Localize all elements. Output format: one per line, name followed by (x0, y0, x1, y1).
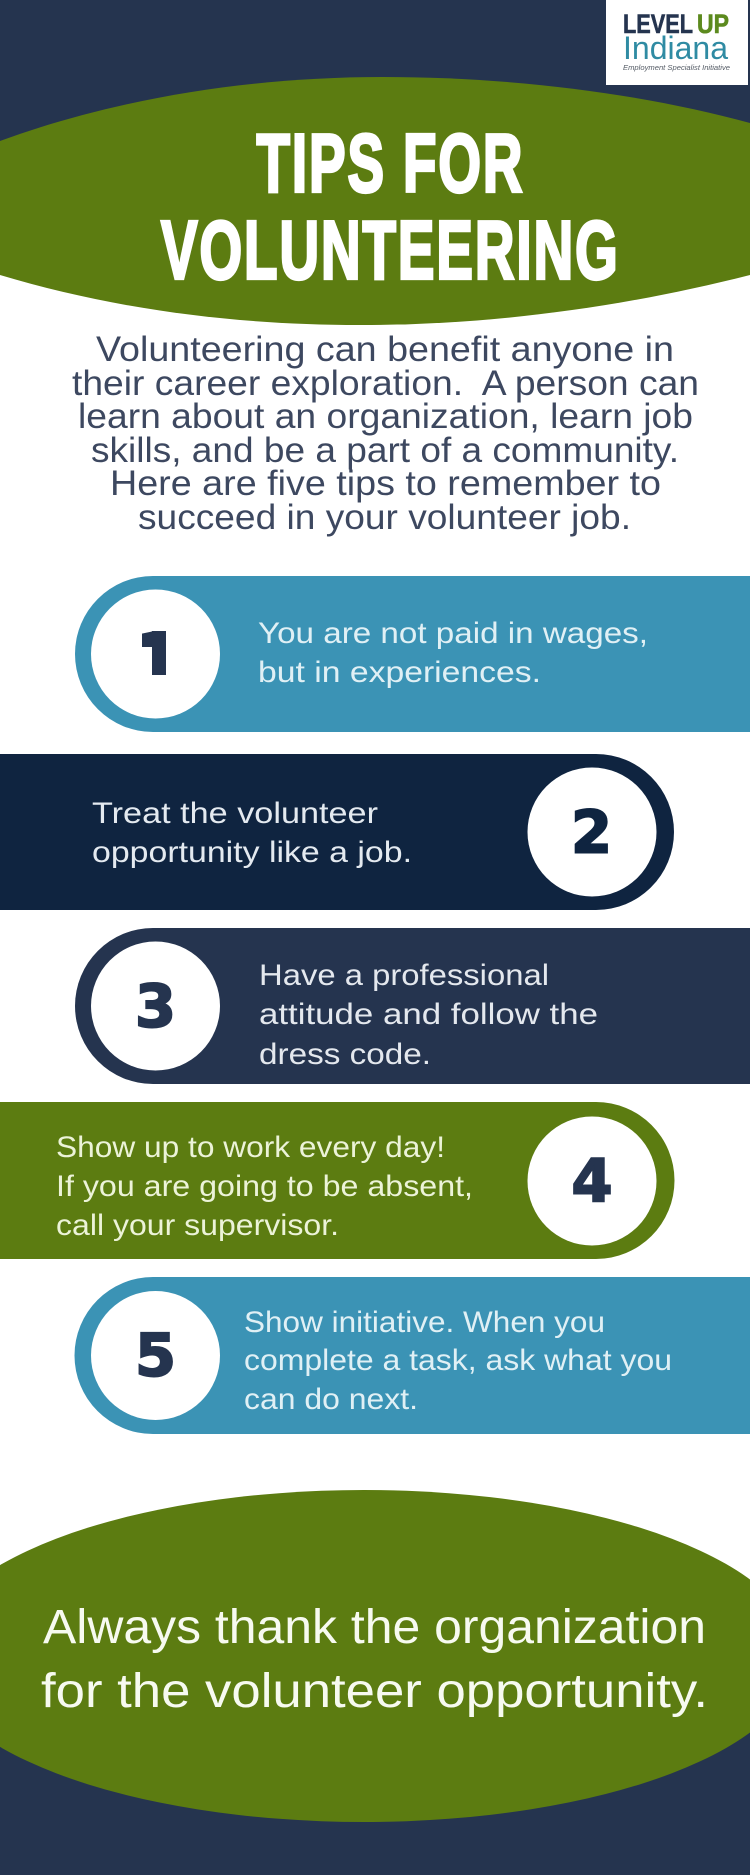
panel: tip 3: 3 (135, 972, 176, 1040)
title: VOLUNTEERING (161, 203, 618, 296)
footer band: navy background (0, 1580, 750, 1875)
panel: tip 5: can do next. (244, 1383, 418, 1416)
intro text block: learn about an organization, learn job (78, 397, 693, 436)
panel: tip 4 (0, 1102, 674, 1259)
panel: tip 3: dress code. (259, 1038, 431, 1071)
panel: tip 4: If you are going to be absent, (56, 1170, 473, 1203)
panel: tip 1: 1 (135, 620, 177, 690)
panel: tip 5: Show initiative. When you (244, 1306, 605, 1339)
panel: tip 3: attitude and follow the (259, 998, 598, 1031)
header band: navy background (0, 0, 750, 200)
panel: tip 5: complete a task, ask what you (244, 1344, 672, 1377)
logo: Level Up Indiana (606, 0, 748, 85)
closing message: for the volunteer opportunity. (41, 1665, 708, 1718)
panel: tip 4: Show up to work every day! (56, 1131, 445, 1164)
panel: tip 2 (0, 754, 674, 910)
panel: tip 5: 5 (135, 1320, 176, 1390)
logo: Level Up Indiana: UP (697, 9, 729, 39)
panel: tip 5 (74, 1277, 750, 1434)
logo: Level Up Indiana: Indiana (623, 30, 728, 66)
logo: Level Up Indiana: Employment Specialist Initiative (623, 65, 730, 72)
panel: tip 1 (75, 576, 750, 732)
intro text block: skills, and be a part of a community. (91, 431, 679, 470)
panel: tip 2: opportunity like a job. (92, 836, 412, 869)
panel: tip 1: You are not paid in wages, (258, 617, 648, 650)
panel: tip 4: call your supervisor. (56, 1209, 339, 1242)
panel: green closing ellipse (0, 1490, 750, 1822)
title (161, 116, 618, 296)
closing message (41, 1601, 708, 1718)
intro text block (72, 330, 699, 537)
intro text block: succeed in your volunteer job. (138, 498, 631, 537)
panel: tip 3: Have a professional (259, 959, 549, 992)
logo: Level Up Indiana: LEVEL (623, 9, 693, 39)
panel: tip 1: but in experiences. (258, 656, 541, 689)
panel: tip 2: 2 (571, 798, 612, 866)
intro text block: their career exploration. A person can (72, 364, 699, 403)
title: TIPS FOR (256, 116, 522, 209)
closing message: Always thank the organization (43, 1601, 706, 1654)
panel: tip 4: 4 (571, 1146, 613, 1216)
panel: green title ellipse (0, 77, 750, 325)
intro text block: Volunteering can benefit anyone in (96, 330, 674, 369)
panel: tip 3 (75, 928, 750, 1084)
intro text block: Here are five tips to remember to (110, 464, 661, 503)
panel: tip 2: Treat the volunteer (92, 797, 378, 830)
